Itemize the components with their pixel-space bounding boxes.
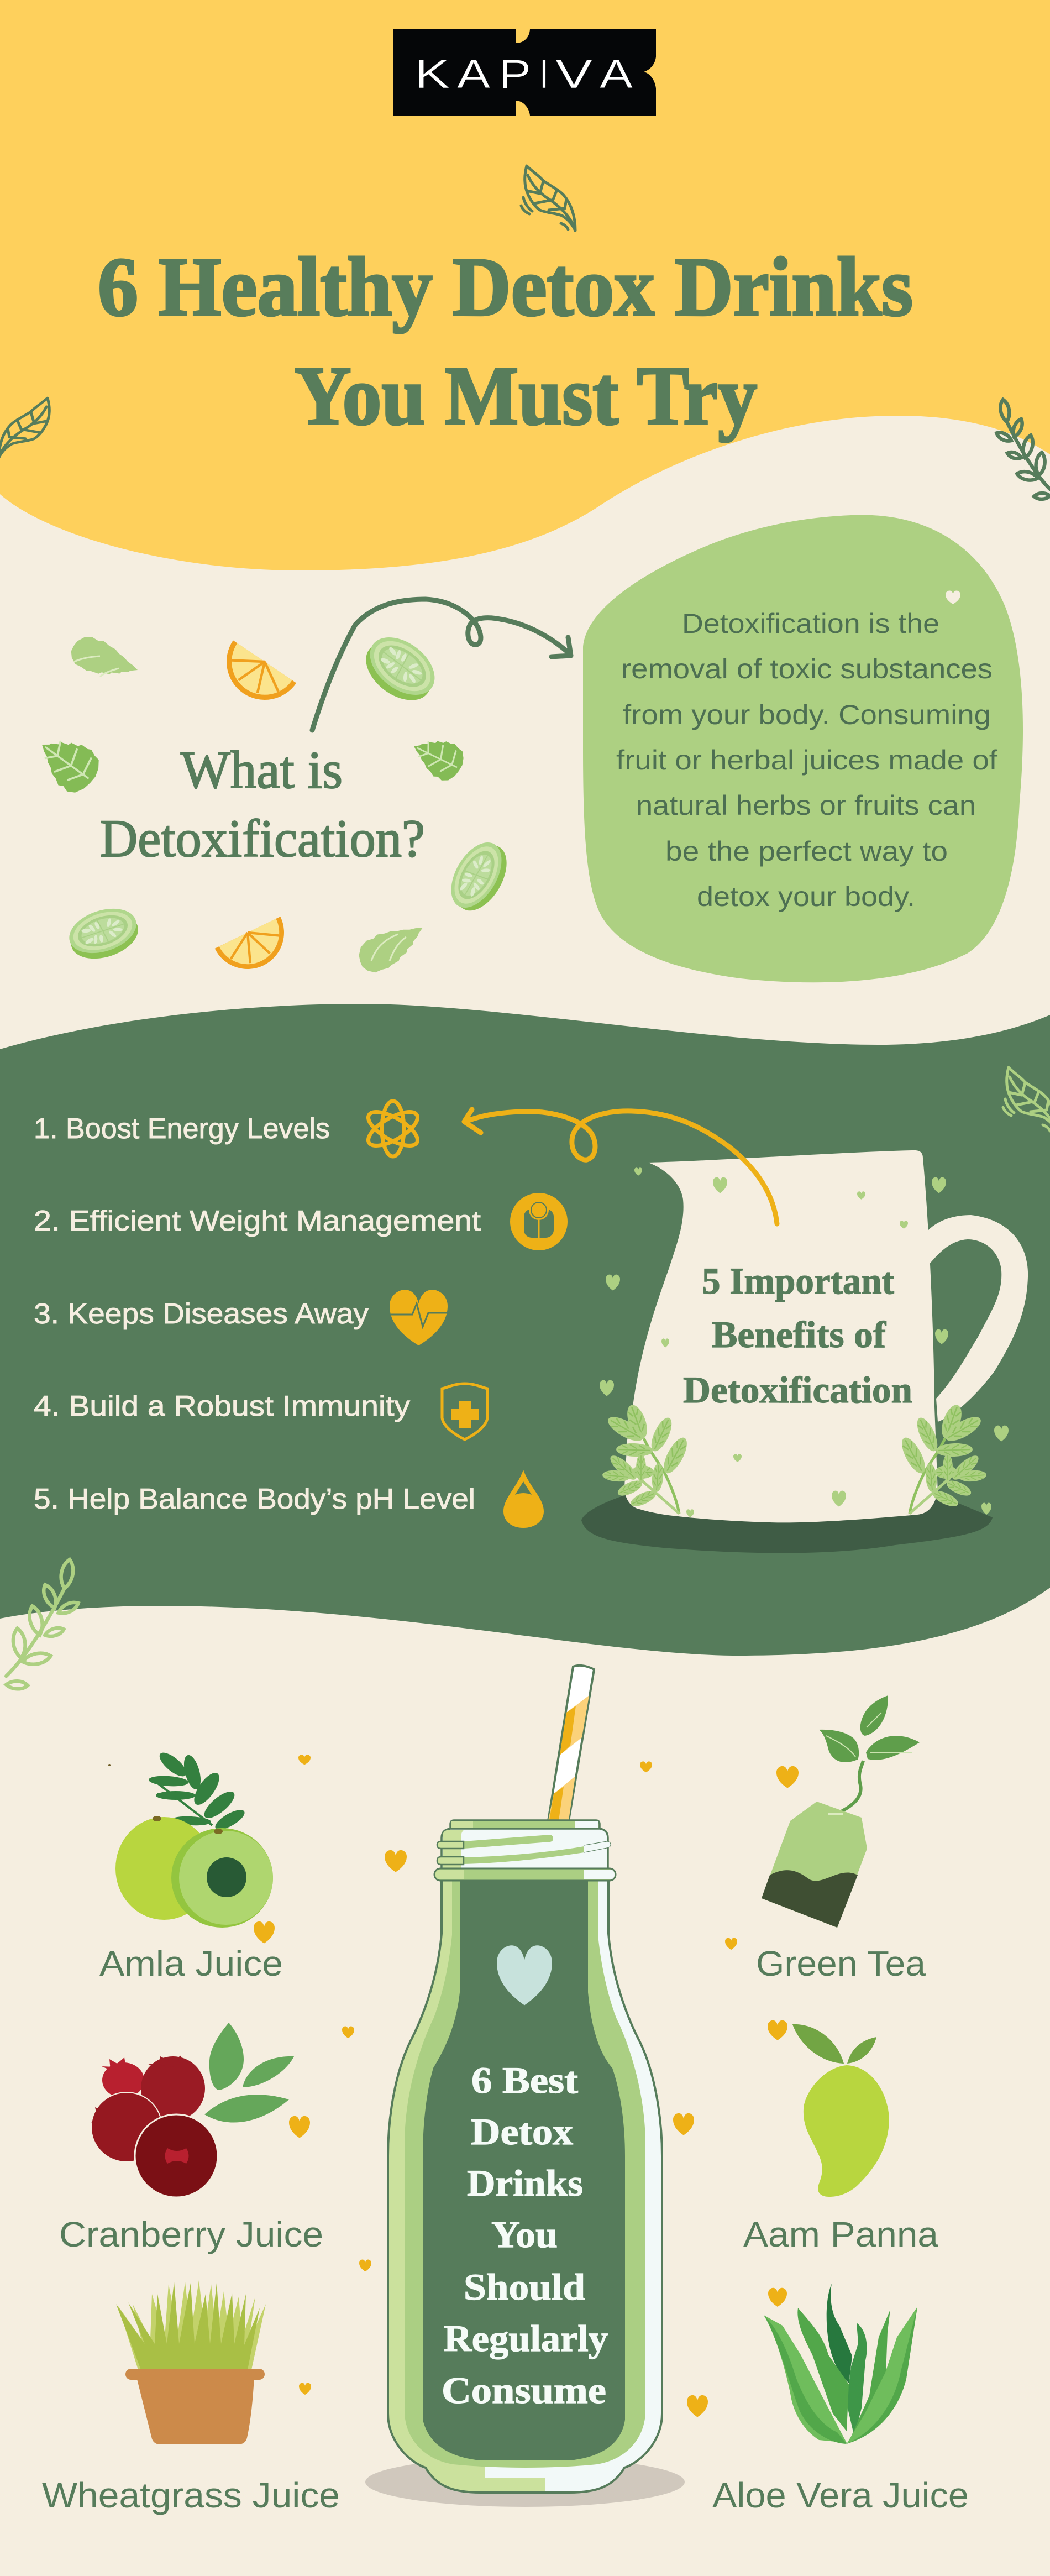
bottle mid liquid band xyxy=(405,1879,645,2468)
bottle heart xyxy=(497,1945,552,2005)
text block: bottle heading: 6 Best xyxy=(471,2059,578,2101)
icon: green mint leaf xyxy=(28,725,107,800)
text block: bottle heading: You xyxy=(491,2213,558,2255)
straw xyxy=(548,1666,594,1821)
heading: what is detoxification xyxy=(100,740,425,868)
icon: light outline leaf on green xyxy=(1003,1067,1050,1132)
label: green tea: Green Tea xyxy=(756,1944,926,1983)
label: aam panna: Aam Panna xyxy=(743,2214,938,2254)
icon: cucumber slice xyxy=(355,626,445,712)
scattered hearts xyxy=(600,1167,1009,1517)
text block: benefits list: 2. Efficient Weight Management xyxy=(34,1205,481,1237)
illustration: mango xyxy=(792,2024,889,2197)
text block: benefits list xyxy=(34,1113,481,1515)
logo: Kapiva: A xyxy=(457,52,490,97)
icon: orange wedge xyxy=(212,640,296,715)
icon: cucumber slice lower left xyxy=(64,900,144,967)
icon: water drop xyxy=(503,1470,544,1528)
text block: detoxification definition: Detoxification is the xyxy=(682,608,939,639)
arrow: what is detoxification to callout xyxy=(312,599,571,730)
logo: Kapiva: P xyxy=(499,52,531,97)
bottle outline body xyxy=(388,1879,662,2493)
heading: what is detoxification: What is xyxy=(181,740,343,799)
heading: 5 important benefits: Benefits of xyxy=(712,1313,886,1355)
text block: detoxification definition: detox your body. xyxy=(697,881,915,912)
heading: 5 important benefits: Detoxification xyxy=(683,1369,912,1411)
icon: sprig top right xyxy=(995,399,1050,499)
bottle dark label panel xyxy=(423,1879,625,2460)
icon: small white heart in blob xyxy=(946,591,960,604)
icon: outline leaf left edge xyxy=(0,398,49,458)
icon: light mint leaf lower xyxy=(352,913,432,979)
text block: detoxification definition: natural herbs or fruits can xyxy=(636,790,976,821)
text block: detoxification definition xyxy=(616,608,998,912)
label: aloe vera juice: Aloe Vera Juice xyxy=(712,2475,969,2515)
text block: bottle heading: Detox xyxy=(471,2111,573,2153)
title: 6 Healthy Detox Drinks xyxy=(98,240,913,333)
illustration: amla xyxy=(108,1749,273,1928)
text block: benefits list: 4. Build a Robust Immunity xyxy=(34,1390,410,1422)
label: wheatgrass juice: Wheatgrass Juice xyxy=(42,2475,340,2515)
illustration: cranberry xyxy=(87,2023,294,2197)
icon: green mint leaf small xyxy=(406,729,469,786)
text block: bottle heading: Consume xyxy=(442,2369,606,2411)
jug illustration xyxy=(581,1150,1028,1553)
panel: yellow header wave xyxy=(0,0,1050,570)
icon: sprig bottom left xyxy=(6,1558,80,1689)
text block: bottle heading xyxy=(442,2059,608,2411)
text block: bottle heading: Drinks xyxy=(467,2162,583,2204)
title: You Must Try xyxy=(295,349,757,442)
jug handle xyxy=(928,1215,1028,1422)
icon: light mint leaf xyxy=(67,632,143,687)
title xyxy=(98,240,913,442)
illustration: aloe vera xyxy=(764,2284,917,2444)
label: amla juice: Amla Juice xyxy=(99,1944,283,1983)
text block: detoxification definition: from your body. Consuming xyxy=(623,699,991,730)
jug shadow xyxy=(581,1495,993,1553)
illustration: green tea bag xyxy=(762,1695,920,1928)
bottle neck and threads xyxy=(434,1820,616,1881)
thread one xyxy=(464,1835,553,1849)
icon: cucumber slice right xyxy=(441,834,517,919)
icon: outline leaf above title xyxy=(521,166,575,231)
logo: Kapiva: V xyxy=(555,52,592,97)
panel: green benefits wave xyxy=(0,1004,1050,1656)
jug body xyxy=(624,1150,938,1522)
thread two xyxy=(464,1846,584,1864)
logo: Kapiva: K xyxy=(414,52,450,97)
icon: heart pulse xyxy=(390,1290,448,1345)
text block: benefits list: 3. Keeps Diseases Away xyxy=(34,1298,369,1330)
heading: 5 important benefits: 5 Important xyxy=(702,1260,894,1302)
logo: Kapiva xyxy=(393,29,656,116)
text block: bottle heading: Regularly xyxy=(444,2317,608,2359)
plant right xyxy=(897,1402,987,1514)
illustration: wheatgrass pot xyxy=(116,2280,266,2444)
text block: bottle heading: Should xyxy=(464,2266,585,2308)
illustration: bottle xyxy=(365,1666,685,2507)
text block: detoxification definition: be the perfect way to xyxy=(665,836,948,867)
bottle white right side xyxy=(405,1874,669,2499)
lip xyxy=(434,1868,616,1881)
bottle shadow xyxy=(365,2457,685,2507)
arrow: jug to benefits list xyxy=(464,1109,777,1224)
logo: Kapiva: A xyxy=(600,52,633,97)
text block: benefits list: 1. Boost Energy Levels xyxy=(34,1113,330,1145)
icon: orange wedge lower xyxy=(215,917,296,981)
logo: Kapiva: I xyxy=(539,52,549,97)
panel: what is detoxification callout blob xyxy=(583,515,1023,982)
text block: benefits list: 5. Help Balance Body’s pH Level xyxy=(34,1483,475,1515)
label: cranberry juice: Cranberry Juice xyxy=(59,2214,323,2254)
text block: detoxification definition: removal of toxic substances xyxy=(621,653,993,684)
icon group: gold hearts xyxy=(254,1755,799,2417)
plant left xyxy=(602,1402,691,1514)
icon: atom xyxy=(364,1101,422,1156)
heading: what is detoxification: Detoxification? xyxy=(100,809,425,868)
icon: weighing scale xyxy=(510,1193,568,1250)
icon: shield with cross xyxy=(442,1384,487,1439)
heading: 5 important benefits xyxy=(683,1260,912,1411)
text block: detoxification definition: fruit or herbal juices made of xyxy=(616,745,998,776)
